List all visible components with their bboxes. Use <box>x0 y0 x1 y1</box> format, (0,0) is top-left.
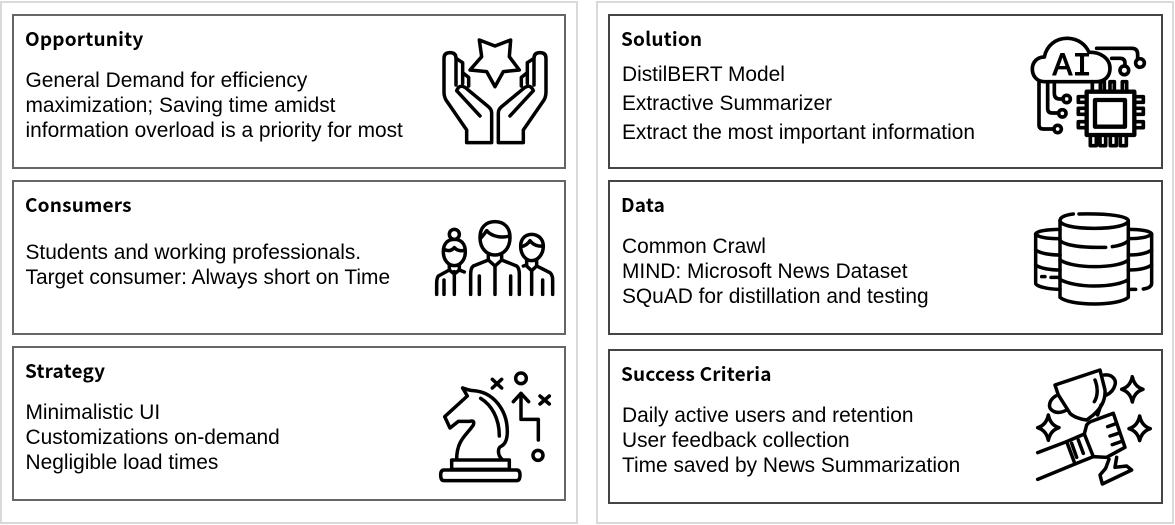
heading: strategy: Strategy <box>25 357 105 384</box>
panel: opportunity <box>12 14 566 169</box>
text: strategy description <box>26 401 280 474</box>
icon: hands holding star <box>444 40 546 143</box>
panel: success criteria <box>608 349 1163 504</box>
heading: consumers: Consumers <box>25 191 132 218</box>
text: data description <box>622 235 929 308</box>
icon: database cylinders <box>1036 214 1152 304</box>
panel: right column frame <box>596 1 1174 524</box>
panel: solution <box>608 14 1163 169</box>
text: consumers description <box>26 241 390 289</box>
heading: data: Data <box>621 191 665 218</box>
text: success criteria description: Daily active users and retention <box>622 404 913 427</box>
text: strategy description: Negligible load times <box>26 451 218 474</box>
text: opportunity description <box>26 69 403 142</box>
icon: AI cloud and chip: AI <box>1053 48 1092 85</box>
text: data description: MIND: Microsoft News Dataset <box>622 260 908 283</box>
icon: hand holding trophy <box>1038 370 1150 484</box>
text: solution description: Extract the most important information <box>622 121 975 144</box>
heading: success criteria: Success Criteria <box>621 360 772 387</box>
text: consumers description: Students and working professionals. <box>26 241 361 264</box>
text: solution description: Extractive Summarizer <box>622 92 832 115</box>
heading: solution: Solution <box>621 25 702 52</box>
icon: chess knight and strategy play <box>441 373 549 481</box>
text: strategy description: Customizations on-demand <box>26 426 280 449</box>
panel: consumers <box>12 180 566 335</box>
text: data description: Common Crawl <box>622 235 766 258</box>
panel: strategy <box>12 346 566 501</box>
panel: left column frame <box>0 1 578 524</box>
text: opportunity description: information overload is a priority for most <box>26 119 403 142</box>
text: opportunity description: General Demand for efficiency <box>26 69 307 92</box>
text: consumers description: Target consumer: Always short on Time <box>26 266 390 289</box>
icon: AI cloud and chip <box>1032 38 1144 146</box>
text: solution description: DistilBERT Model <box>622 63 785 86</box>
heading: opportunity: Opportunity <box>25 25 143 52</box>
text: strategy description: Minimalistic UI <box>26 401 160 424</box>
text: success criteria description <box>622 404 960 477</box>
text: solution description <box>622 63 975 144</box>
text: opportunity description: maximization; Saving time amidst <box>26 94 335 117</box>
text: success criteria description: Time saved by News Summarization <box>622 454 960 477</box>
icon: group of people <box>437 222 553 294</box>
panel: data <box>608 180 1163 335</box>
text: success criteria description: User feedback collection <box>622 429 850 452</box>
text: data description: SQuAD for distillation and testing <box>622 285 929 308</box>
